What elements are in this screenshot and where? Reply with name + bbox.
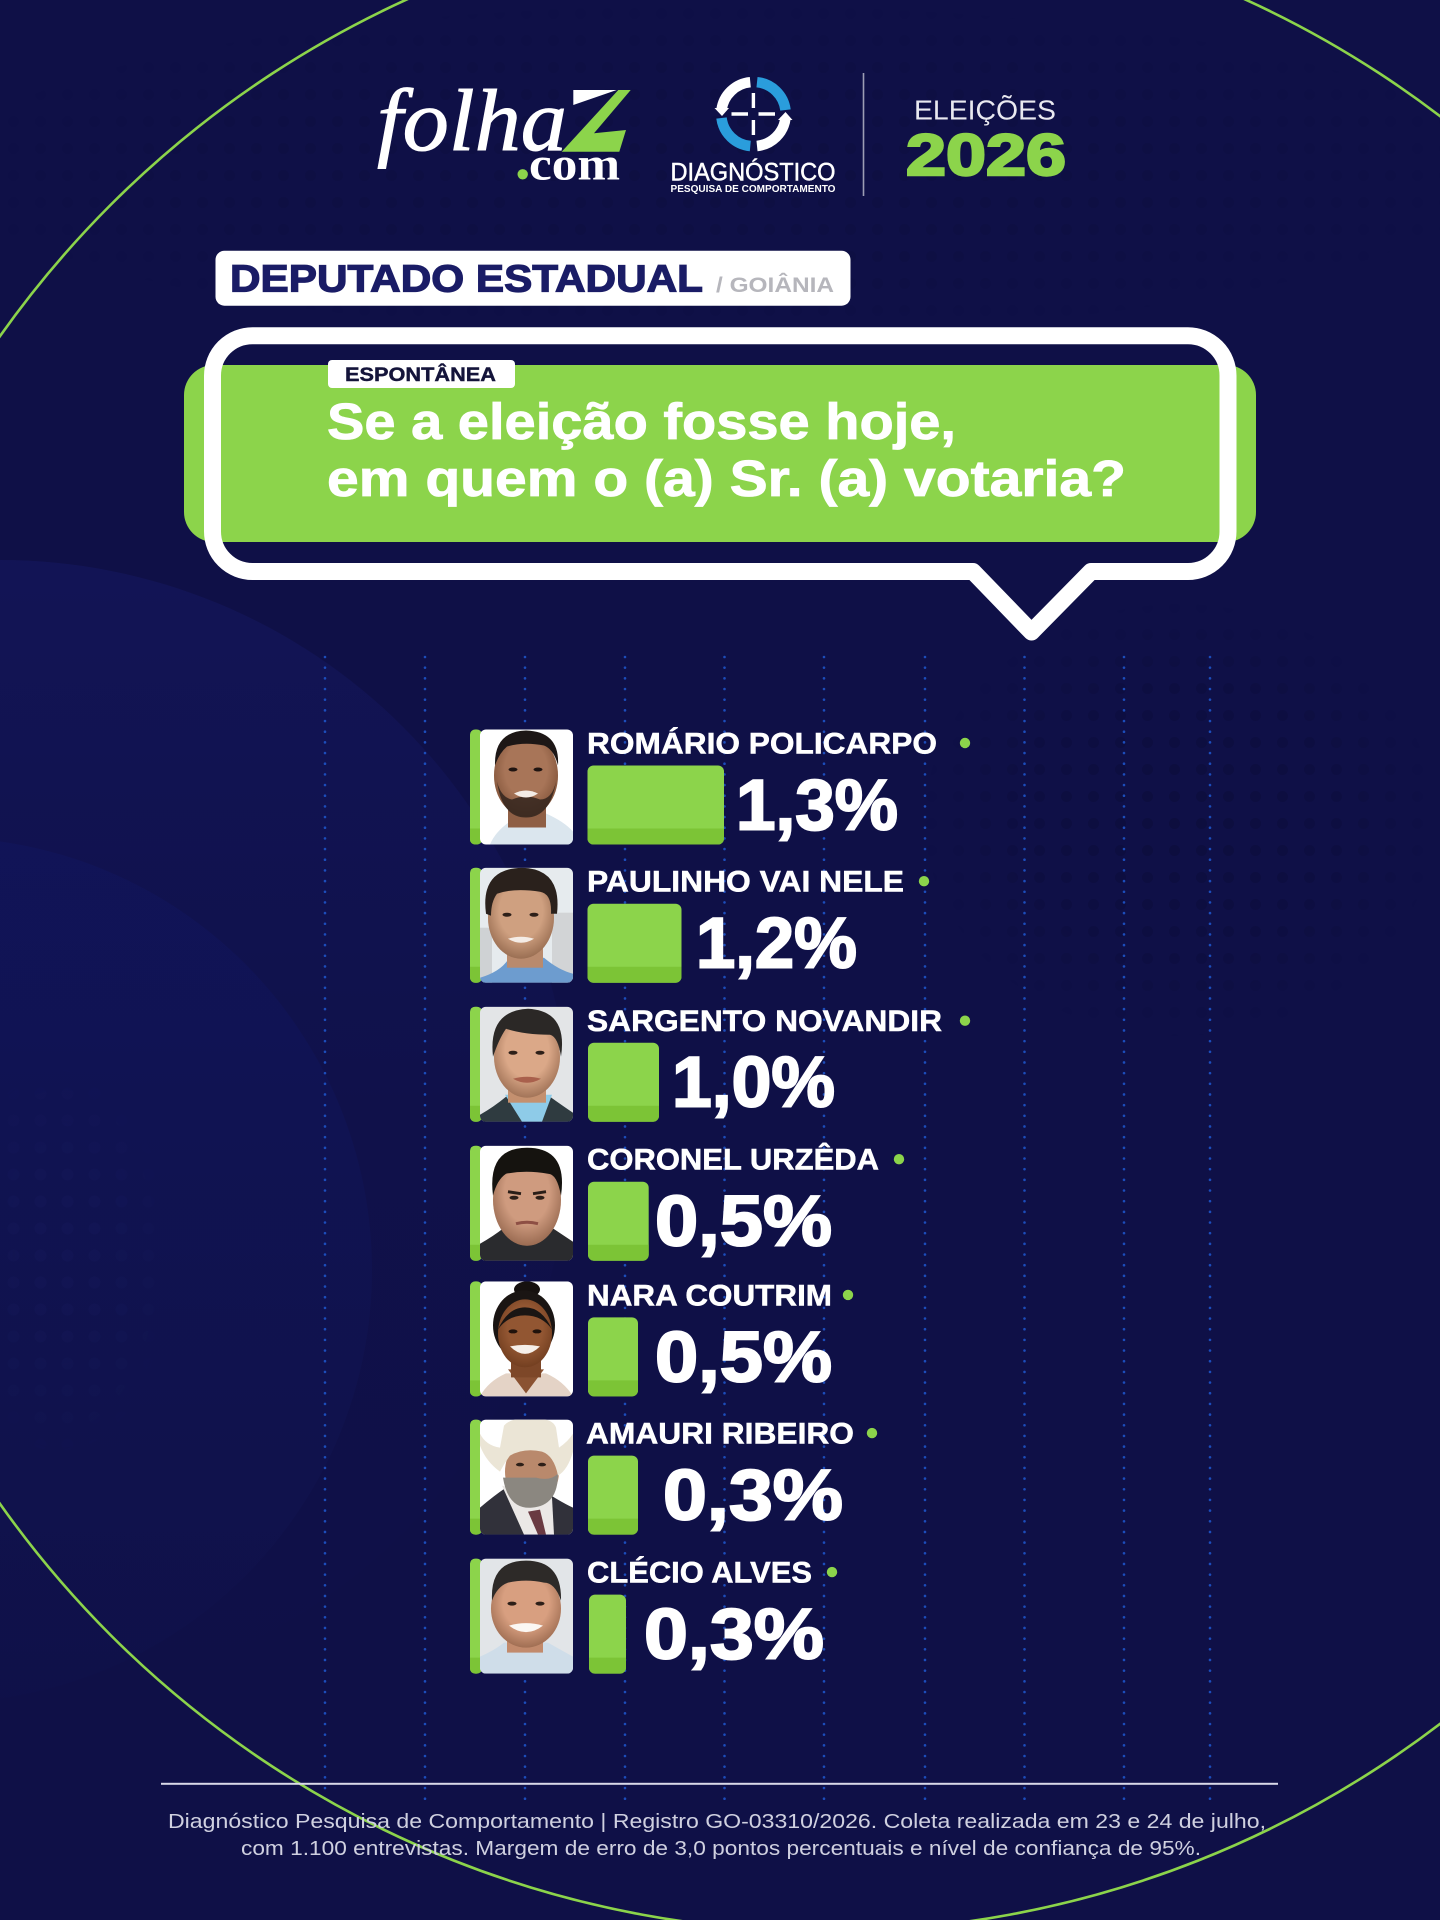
candidate row: Sargento Novandir bbox=[470, 1005, 970, 1123]
candidate row: Romário Policarpo: 1,3% bbox=[736, 766, 898, 846]
divider bbox=[863, 73, 864, 196]
candidate row: Coronel Urzêda: CORONEL URZÊDA bbox=[587, 1143, 879, 1177]
candidate row: Paulinho Vai Nele: 1,2% bbox=[696, 905, 857, 984]
photo: Coronel Urzêda bbox=[480, 1146, 573, 1261]
candidate row: Sargento Novandir: SARGENTO NOVANDIR bbox=[587, 1005, 942, 1038]
candidate row: Amauri Ribeiro: 0,3% bbox=[663, 1457, 843, 1536]
candidate row: Clécio Alves: 0,3% bbox=[644, 1596, 824, 1675]
photo: Romário Policarpo bbox=[480, 730, 573, 844]
tag: Espontânea: ESPONTÂNEA bbox=[345, 364, 496, 386]
logo: Diagnóstico: PESQUISA DE COMPORTAMENTO bbox=[670, 184, 836, 195]
candidate row: Clécio Alves bbox=[470, 1556, 837, 1675]
background bbox=[0, 560, 1212, 1800]
footer methodology text bbox=[168, 1811, 1266, 1860]
candidate row: Romário Policarpo: ROMÁRIO POLICARPO bbox=[587, 726, 937, 760]
heading pill: Deputado Estadual / Goiânia: / GOIÂNIA bbox=[716, 273, 834, 297]
candidate row: Amauri Ribeiro bbox=[470, 1418, 877, 1536]
logo: folhaZ.com: folha bbox=[377, 73, 567, 170]
question speech bubble panel bbox=[184, 336, 1256, 632]
logo: folhaZ.com: com bbox=[529, 138, 620, 190]
footer methodology text: com 1.100 entrevistas. Margem de erro de 3,0 pontos percentuais e nível de confiança de 95%. bbox=[241, 1838, 1201, 1860]
footer methodology text: Diagnóstico Pesquisa de Comportamento | Registro GO-03310/2026. Coleta realizada em 23 e 24 de julho, bbox=[168, 1811, 1266, 1833]
photo: Paulinho Vai Nele bbox=[480, 868, 573, 983]
logo: Diagnóstico: DIAGNÓSTICO bbox=[670, 158, 836, 186]
photo: Nara Coutrim bbox=[480, 1281, 573, 1396]
candidate row: Romário Policarpo bbox=[470, 726, 970, 846]
tag: Espontânea bbox=[328, 360, 515, 388]
question text bbox=[327, 393, 1126, 507]
footer rule bbox=[161, 1783, 1278, 1785]
candidate row: Nara Coutrim: 0,5% bbox=[655, 1318, 832, 1397]
badge: Eleições 2026: ELEIÇÕES bbox=[914, 94, 1056, 126]
candidate row: Sargento Novandir: 1,0% bbox=[672, 1044, 835, 1123]
badge: Eleições 2026 bbox=[906, 94, 1066, 188]
candidate row: Coronel Urzêda bbox=[470, 1143, 904, 1262]
candidate row: Nara Coutrim: NARA COUTRIM bbox=[587, 1279, 832, 1312]
heading pill: Deputado Estadual / Goiânia: DEPUTADO ESTADUAL bbox=[230, 258, 703, 300]
badge: Eleições 2026: 2026 bbox=[906, 123, 1066, 188]
candidate row: Coronel Urzêda: 0,5% bbox=[655, 1183, 832, 1262]
question text: Se a eleição fosse hoje, bbox=[327, 393, 956, 450]
logo: folhaZ.com bbox=[377, 73, 631, 190]
logo: Diagnóstico bbox=[670, 82, 836, 195]
question text: em quem o (a) Sr. (a) votaria? bbox=[327, 450, 1126, 507]
photo: Sargento Novandir bbox=[480, 1007, 573, 1122]
candidate row: Amauri Ribeiro: AMAURI RIBEIRO bbox=[586, 1418, 854, 1451]
heading pill: Deputado Estadual / Goiânia bbox=[216, 251, 850, 306]
photo: Amauri Ribeiro bbox=[480, 1419, 573, 1535]
candidate row: Clécio Alves: CLÉCIO ALVES bbox=[587, 1556, 812, 1590]
photo: Clécio Alves bbox=[480, 1559, 573, 1674]
candidate row: Paulinho Vai Nele bbox=[470, 866, 929, 984]
candidate row: Paulinho Vai Nele: PAULINHO VAI NELE bbox=[587, 866, 904, 899]
candidate row: Nara Coutrim bbox=[470, 1279, 853, 1397]
